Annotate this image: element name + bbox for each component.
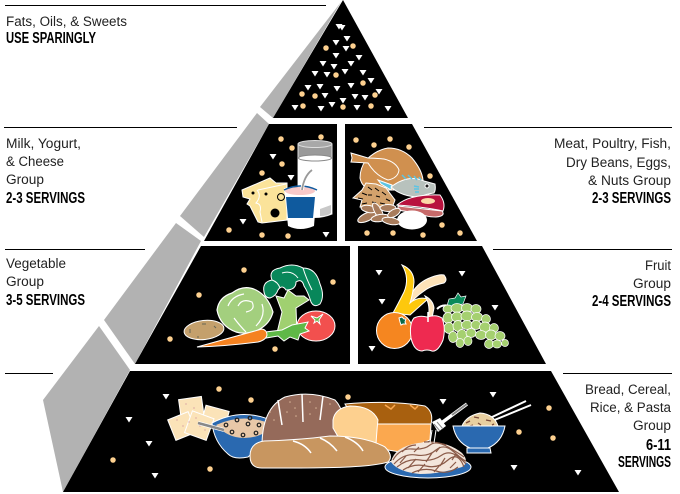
label: vegetable group: Vegetable — [6, 256, 66, 271]
pyramid side: gray shaded left face — [43, 2, 341, 492]
illustration: orange — [376, 312, 412, 348]
label: bread group: Group — [633, 418, 671, 433]
scattered fat circles — [113, 46, 553, 469]
label: meat group: Meat, Poultry, Fish, — [554, 136, 671, 151]
illustration: steak — [397, 195, 444, 217]
label: milk, yogurt and cheese group: & Cheese — [6, 154, 64, 169]
illustration: yogurt cup — [284, 170, 317, 229]
illustration: cereal bowl — [198, 414, 277, 458]
illustration: brown bread loaf — [262, 394, 345, 446]
illustration: fork — [432, 404, 467, 432]
label: bread group — [585, 382, 671, 471]
illustration: potato — [183, 318, 225, 342]
illustration: carrot — [197, 322, 309, 347]
label: meat group — [554, 136, 671, 207]
illustration: baguette — [250, 436, 390, 468]
label: meat group: Dry Beans, Eggs, — [566, 155, 671, 170]
illustration: cheese wedges — [242, 178, 287, 223]
label: fruit group: Group — [633, 276, 671, 291]
illustration: fish — [378, 175, 435, 197]
illustration: tomato — [297, 311, 335, 341]
label: vegetable group: Group — [6, 274, 44, 289]
label: fats, oils and sweets: Fats, Oils, & Sweets — [6, 14, 127, 29]
label: fats, oils and sweets — [6, 14, 127, 47]
illustration: broccoli — [264, 265, 322, 333]
illustration: rice bowl with chopsticks — [453, 401, 531, 453]
label: milk, yogurt and cheese group: 2-3 SERVINGS — [6, 190, 85, 207]
illustration: white loaf — [333, 402, 432, 452]
illustration: turkey — [351, 148, 423, 190]
illustration: dry beans pile — [353, 183, 395, 208]
label: vegetable group: 3-5 SERVINGS — [6, 292, 85, 309]
illustration: milk glass — [298, 140, 332, 218]
label: milk, yogurt and cheese group: Group — [6, 172, 44, 187]
illustration: crackers — [168, 396, 229, 440]
label: meat group: & Nuts Group — [588, 173, 671, 188]
illustration: peanuts — [356, 201, 402, 226]
label: milk, yogurt and cheese group: Milk, Yogurt, — [6, 136, 81, 151]
label: milk, yogurt and cheese group — [6, 136, 85, 207]
label: bread group: 6-11 — [646, 437, 671, 454]
label: vegetable group — [6, 256, 85, 309]
leader lines — [4, 6, 672, 374]
scattered sugar triangles — [126, 24, 582, 478]
label: bread group: Bread, Cereal, — [585, 382, 671, 397]
label: fats, oils and sweets: USE SPARINGLY — [6, 30, 96, 47]
illustration: lettuce — [217, 288, 273, 333]
illustration: spaghetti plate — [385, 430, 471, 478]
label: fruit group: Fruit — [645, 258, 671, 273]
illustration: apple — [410, 312, 444, 351]
illustration: egg — [397, 210, 427, 230]
illustration: banana — [393, 265, 446, 318]
label: fruit group — [592, 258, 671, 310]
illustration: grapes — [437, 293, 508, 348]
label: bread group: Rice, & Pasta — [590, 400, 671, 415]
